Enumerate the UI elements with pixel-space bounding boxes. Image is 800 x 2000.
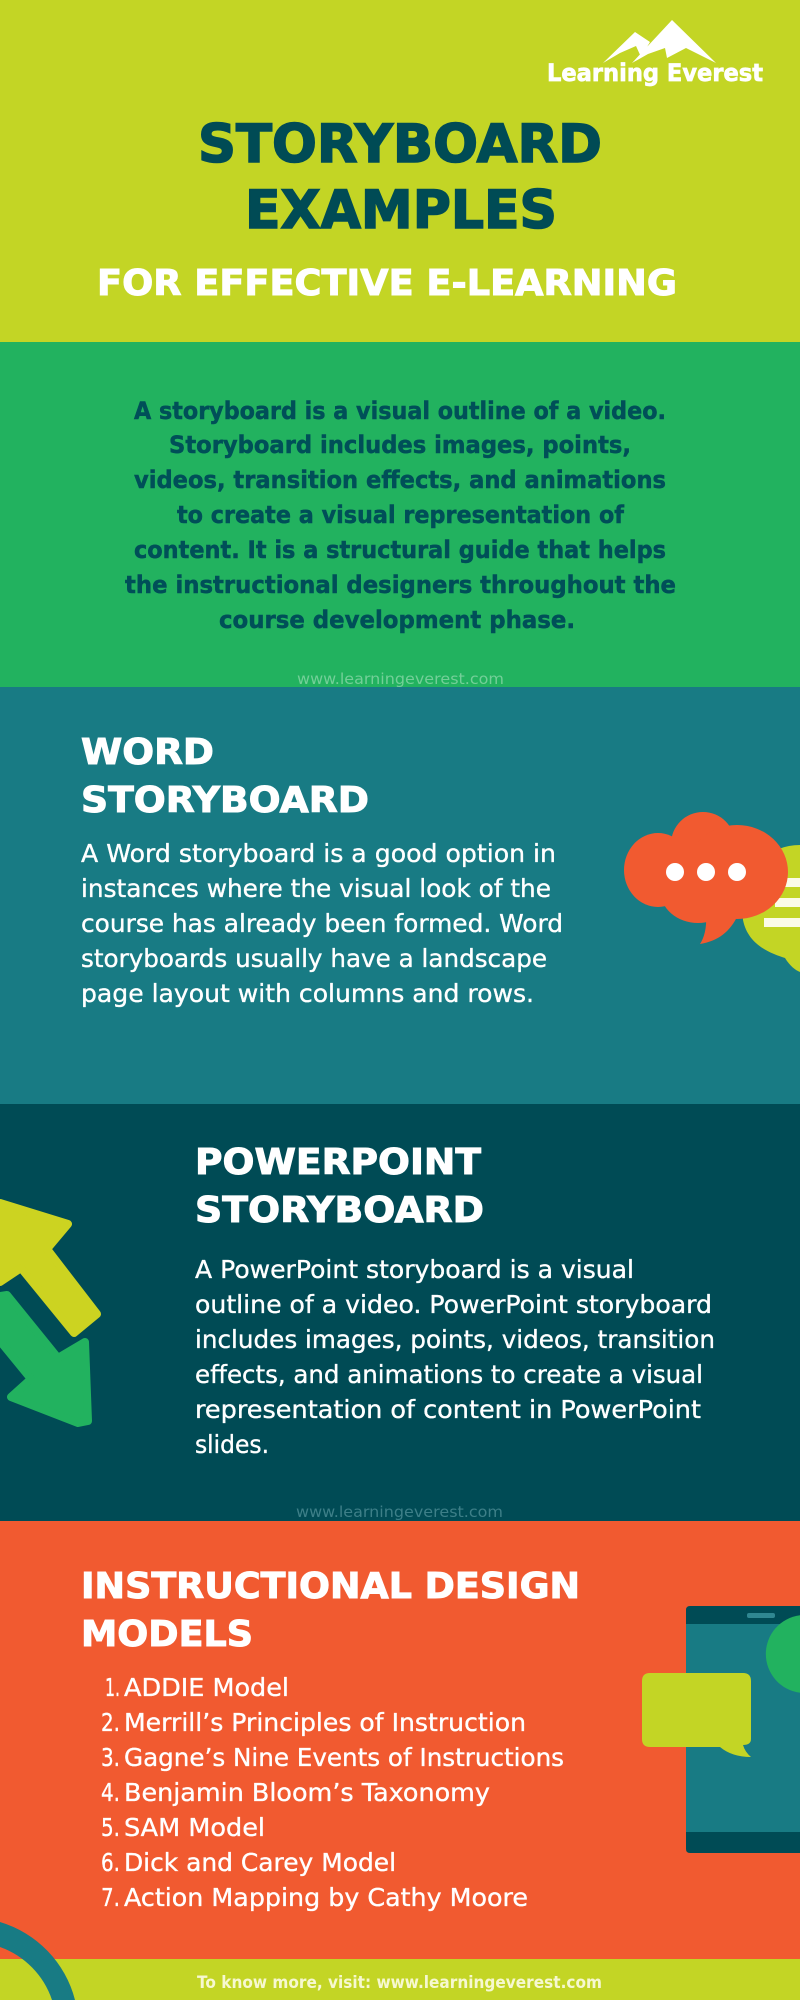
icon: phone with chat bubbles	[642, 1606, 800, 1853]
subtitle: FOR EFFECTIVE E-LEARNING	[97, 263, 677, 304]
body text: powerpoint storyboard: effects, and animations to create a visual	[195, 1360, 703, 1389]
heading: instructional design models	[81, 1566, 580, 1655]
numbered list of models: Merrill’s Principles of Instruction	[124, 1708, 526, 1737]
panel: word storyboard	[0, 687, 800, 1104]
intro paragraph: content. It is a structural guide that helps	[134, 536, 666, 564]
intro paragraph: Storyboard includes images, points,	[169, 431, 631, 459]
logo: Learning Everest: Learning Everest	[547, 59, 763, 87]
panel: introduction	[0, 342, 800, 688]
numbered list of models: 4.	[101, 1778, 120, 1807]
body text: word storyboard: A Word storyboard is a good option in	[81, 839, 556, 868]
footer text: To know more, visit: www.learningeverest.com	[197, 1973, 602, 1992]
icon: speech bubbles	[624, 812, 800, 972]
numbered list of models: 6.	[101, 1848, 120, 1877]
intro paragraph: A storyboard is a visual outline of a video.	[134, 397, 666, 425]
heading: powerpoint storyboard: POWERPOINT	[195, 1142, 481, 1183]
decorative ring: bottom left arc	[0, 1922, 75, 2000]
panel: powerpoint storyboard	[0, 1104, 800, 1521]
body text: powerpoint storyboard: representation of content in PowerPoint	[195, 1395, 701, 1424]
intro paragraph: the instructional designers throughout the	[125, 571, 676, 599]
intro paragraph: videos, transition effects, and animations	[134, 466, 666, 494]
numbered list of models: SAM Model	[124, 1813, 265, 1842]
watermark: www.learningeverest.com	[296, 1503, 503, 1521]
heading: powerpoint storyboard	[195, 1142, 484, 1231]
body text: word storyboard: instances where the visual look of the	[81, 874, 551, 903]
heading: instructional design models: INSTRUCTIONAL DESIGN	[81, 1566, 580, 1607]
icon: green arrow	[0, 1295, 88, 1423]
heading: word storyboard: WORD	[81, 732, 214, 773]
body text: word storyboard: course has already been formed. Word	[81, 909, 563, 938]
panel: header	[0, 0, 800, 342]
body text: word storyboard: storyboards usually have a landscape	[81, 944, 547, 973]
numbered list of models: 7.	[101, 1883, 120, 1912]
title: STORYBOARD	[198, 114, 602, 175]
panel: footer	[0, 1959, 800, 2000]
intro paragraph: course development phase.	[219, 606, 575, 634]
numbered list of models: 3.	[101, 1743, 120, 1772]
body text: powerpoint storyboard: A PowerPoint storyboard is a visual	[195, 1255, 634, 1284]
heading: word storyboard	[81, 732, 369, 821]
heading: instructional design models: MODELS	[81, 1614, 253, 1655]
numbered list of models: 5.	[101, 1813, 120, 1842]
logo: Learning Everest	[547, 20, 763, 87]
intro paragraph: to create a visual representation of	[177, 501, 625, 529]
intro paragraph	[125, 397, 676, 634]
numbered list of models: Gagne’s Nine Events of Instructions	[124, 1743, 564, 1772]
numbered list of models: ADDIE Model	[124, 1673, 289, 1702]
numbered list of models: 2.	[101, 1708, 120, 1737]
body text: word storyboard: page layout with columns and rows.	[81, 979, 534, 1008]
icon: lime arrow	[0, 1203, 97, 1333]
heading: word storyboard: STORYBOARD	[81, 780, 369, 821]
panel: instructional design models	[0, 1521, 800, 1959]
body text: powerpoint storyboard: includes images, points, videos, transition	[195, 1325, 715, 1354]
numbered list of models: Benjamin Bloom’s Taxonomy	[124, 1778, 490, 1807]
numbered list of models: Action Mapping by Cathy Moore	[124, 1883, 528, 1912]
title	[198, 114, 602, 241]
body text: word storyboard	[81, 839, 563, 1008]
body text: powerpoint storyboard: outline of a video. PowerPoint storyboard	[195, 1290, 712, 1319]
body text: powerpoint storyboard: slides.	[195, 1430, 269, 1459]
heading: powerpoint storyboard: STORYBOARD	[195, 1190, 484, 1231]
title: EXAMPLES	[245, 180, 557, 241]
numbered list of models: 1.	[105, 1673, 120, 1702]
watermark: www.learningeverest.com	[297, 670, 504, 688]
body text: powerpoint storyboard	[195, 1255, 715, 1459]
numbered list of models: Dick and Carey Model	[124, 1848, 396, 1877]
numbered list of models	[101, 1673, 564, 1912]
